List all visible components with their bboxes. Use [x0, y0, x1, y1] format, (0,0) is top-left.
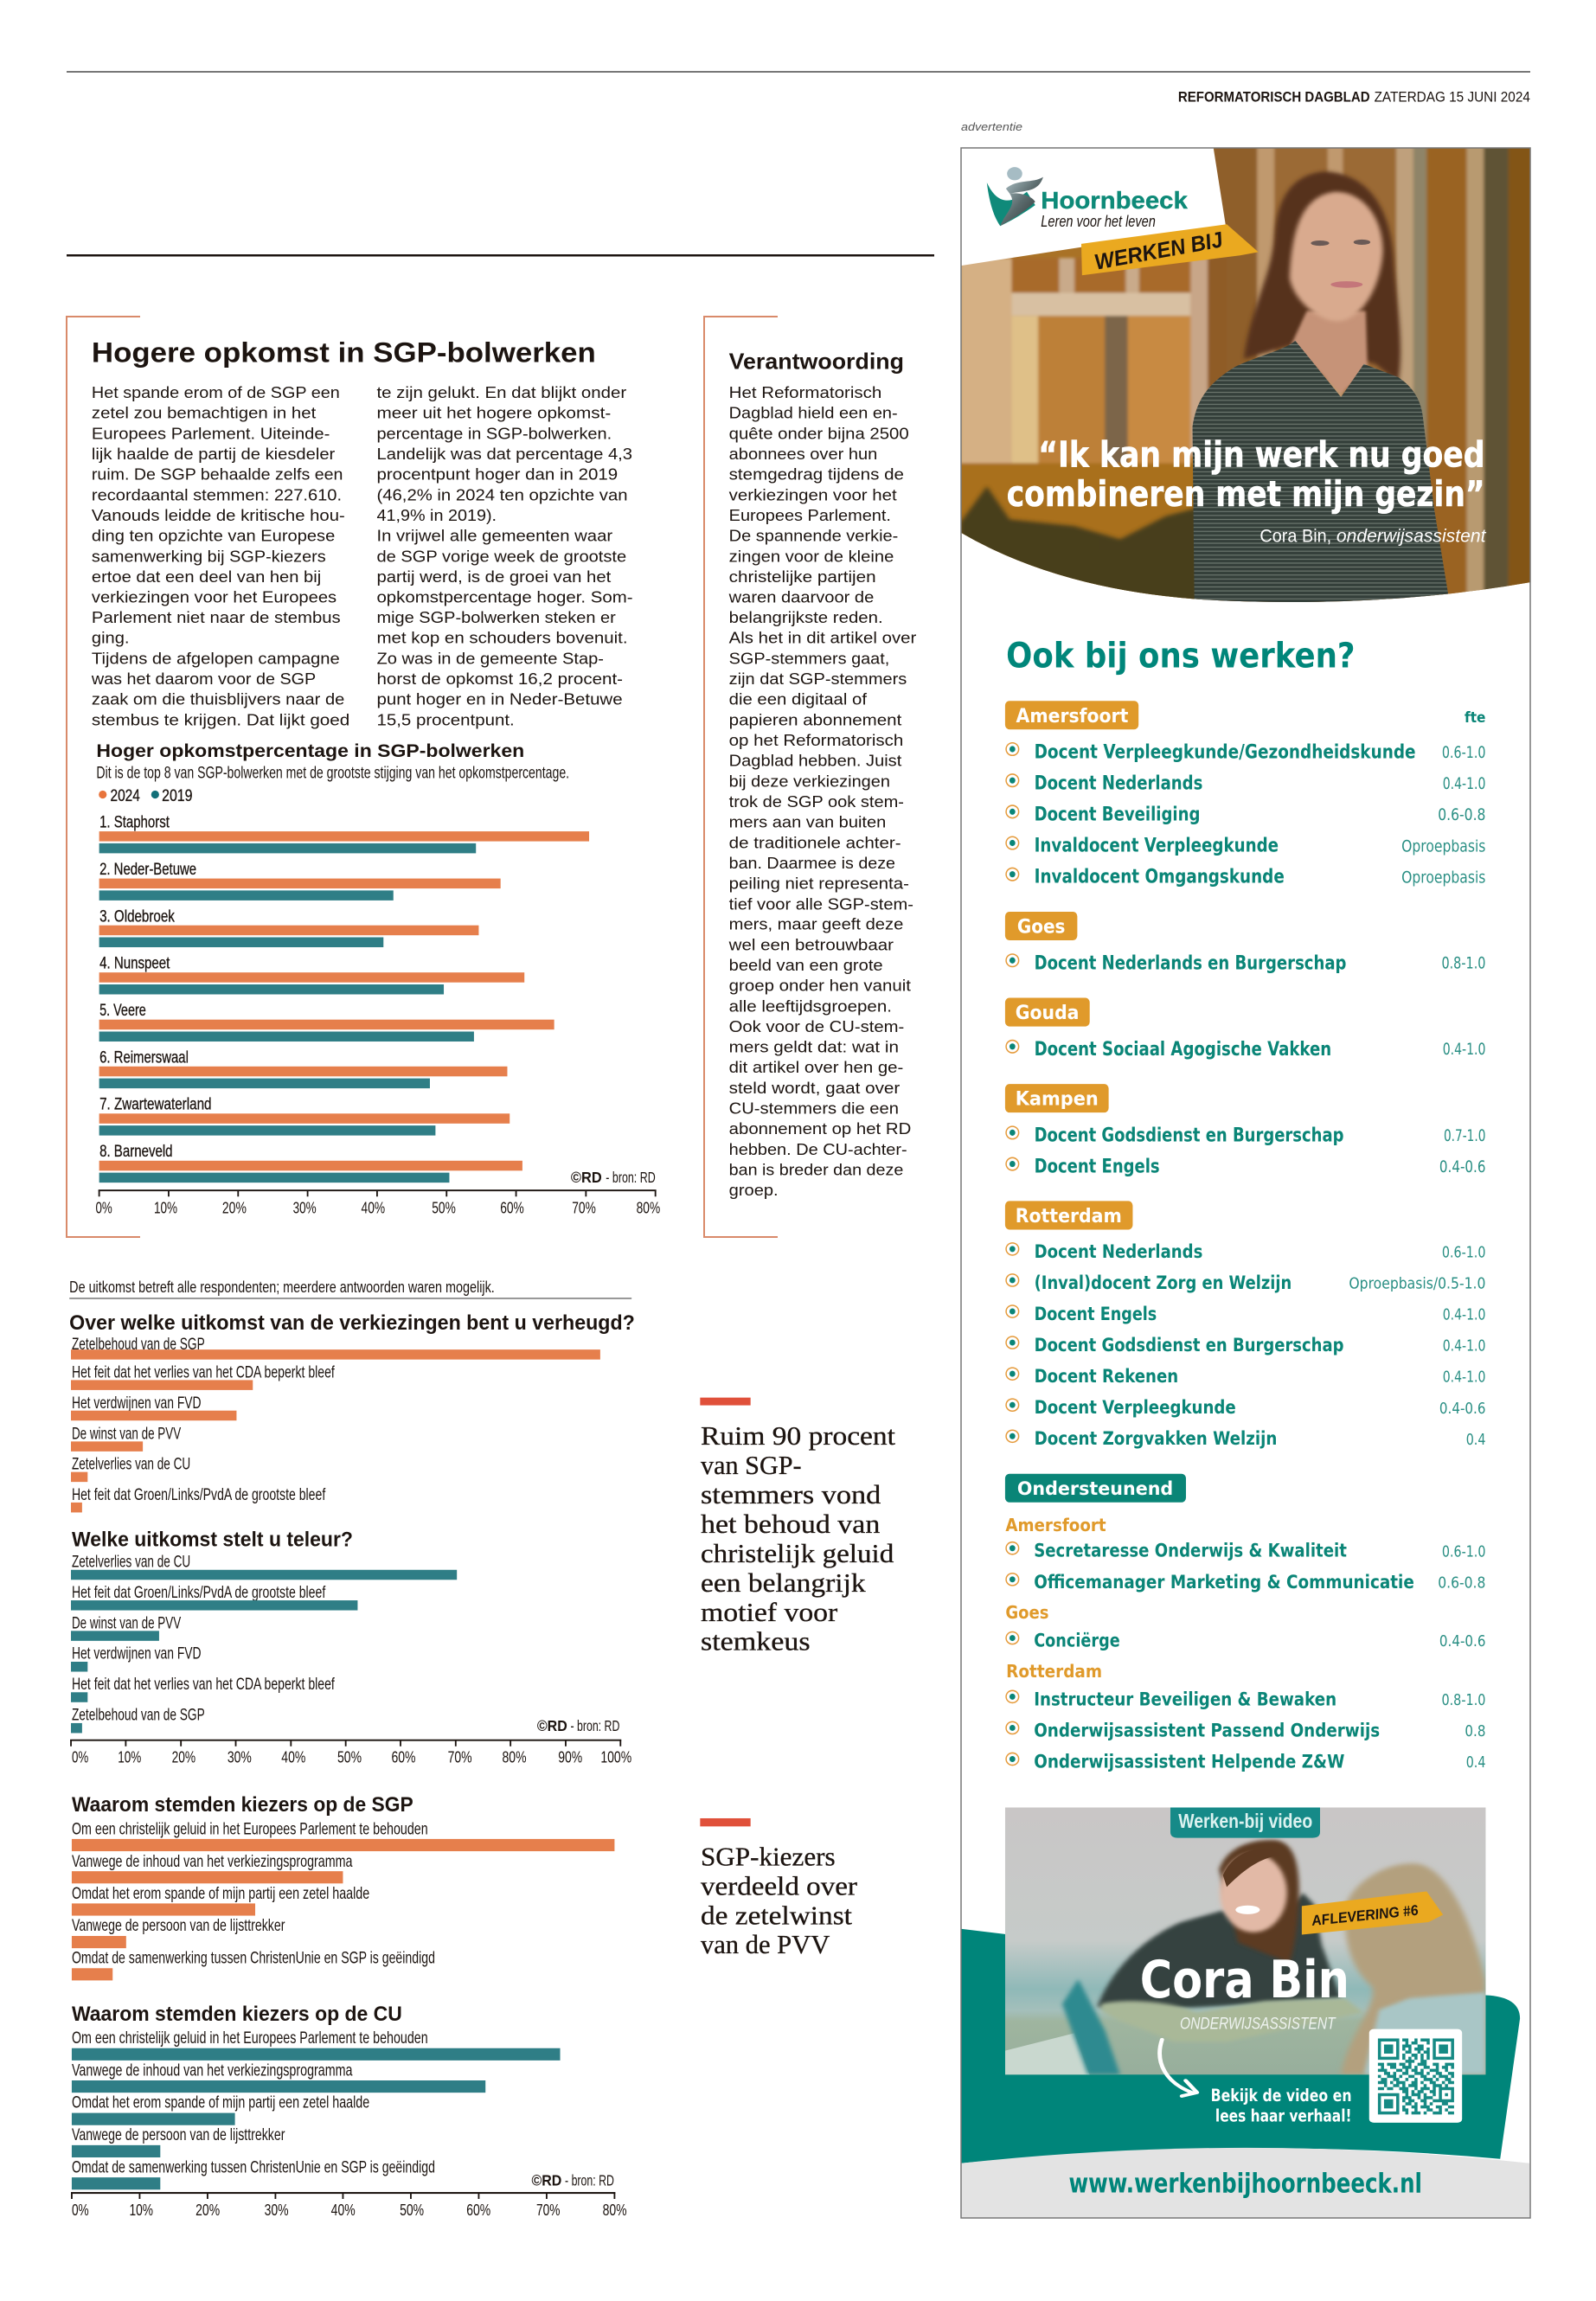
group: ondersteunend Amersfoort: Officemanager Marketing & Communicatie — [1034, 1572, 1414, 1593]
heading: CU: Waarom stemden kiezers op de CU — [72, 2003, 402, 2026]
verantwoording body text: ban is breder dan deze — [729, 1161, 903, 1179]
article text column 1: samenwerking bij SGP-kiezers — [92, 548, 326, 565]
group: Rotterdam vacancies: Docent Zorgvakken Welzijn — [1035, 1428, 1277, 1450]
article text column 2: horst de opkomst 16,2 procent- — [376, 670, 623, 688]
source credit — [531, 2172, 614, 2189]
photo: woman in wooden interior — [960, 145, 1531, 609]
verantwoording body text: quête onder bijna 2500 — [729, 424, 909, 442]
row: Oldebroek: 3. Oldebroek — [99, 907, 175, 926]
call to action text: Bekijk de video en — [1211, 2086, 1352, 2106]
verantwoording body text — [728, 383, 916, 1199]
x axis: 40% — [331, 2201, 356, 2219]
group: Amersfoort: Docent Nederlands — [1035, 772, 1202, 795]
bar chart: teleur: Het feit dat Groen/Links/PvdA de grootste bleef — [72, 1584, 325, 1602]
source credit: ©RD — [571, 1170, 602, 1187]
callout: verdeeld over PVV: SGP-kiezers — [701, 1842, 836, 1871]
note rule — [69, 1298, 631, 1299]
logo: Hoornbeeck: Hoornbeeck — [1041, 188, 1188, 214]
row: Veere — [99, 1002, 554, 1042]
verantwoording body text: abonnement op het RD — [729, 1119, 911, 1138]
callout: ruim 90 procent: stemkeus — [701, 1626, 811, 1656]
row: Zwartewaterland: 7. Zwartewaterland — [99, 1095, 212, 1113]
group: ondersteunend Rotterdam: Onderwijsassistent Helpende Z&W — [1034, 1751, 1344, 1773]
group: Amersfoort: Invaldocent Verpleegkunde — [1035, 835, 1279, 856]
callout: ruim 90 procent: van SGP- — [701, 1451, 802, 1480]
verantwoording body text: Het Reformatorisch — [729, 383, 881, 401]
verantwoording body text: Dagblad hebben. Juist — [729, 752, 902, 770]
ad: vacancies list part 1 — [1005, 636, 1485, 1229]
x axis: 0% — [72, 2201, 89, 2219]
bar chart: verheugd: Het feit dat het verlies van het CDA beperkt bleef — [72, 1363, 335, 1381]
x axis: 90% — [558, 1749, 582, 1766]
article text column 2: punt hoger en in Neder-Betuwe — [376, 690, 623, 708]
x axis: 30% — [293, 1200, 317, 1217]
tape: aflevering #6 — [1302, 1891, 1443, 1934]
group: Amersfoort: fte — [1465, 709, 1485, 726]
article text column 2: percentage in SGP-bolwerken. — [376, 425, 612, 442]
x axis: 40% — [362, 1200, 385, 1217]
article text column 2 — [376, 383, 633, 728]
bar chart: CU: Omdat het erom spande of mijn partij een zetel haalde — [72, 2093, 369, 2112]
top rule and date line — [67, 71, 1530, 106]
name: Cora Bin: Cora Bin — [1140, 1951, 1349, 2010]
bar chart: teleur — [71, 1553, 457, 1733]
group: Amersfoort: 0.6-0.8 — [1438, 806, 1485, 824]
bar chart: SGP: Vanwege de persoon van de lijsttrekker — [72, 1916, 285, 1934]
group: Amersfoort — [1005, 701, 1485, 888]
group: ondersteunend Rotterdam: 0.8-1.0 — [1441, 1692, 1485, 1709]
article text column 2: 41,9% in 2019). — [376, 506, 497, 524]
x axis: 10% — [154, 1200, 177, 1217]
row: Barneveld — [99, 1143, 522, 1183]
heading: teleur: Welke uitkomst stelt u teleur? — [72, 1528, 353, 1551]
group: Kampen: Kampen — [1016, 1088, 1099, 1111]
group: Amersfoort: Docent Verpleegkunde/Gezondheidskunde — [1035, 741, 1416, 763]
group: Rotterdam vacancies: (Inval)docent Zorg en Welzijn — [1035, 1272, 1292, 1294]
callout: ruim 90 procent: christelijk geluid — [701, 1539, 894, 1568]
group: Rotterdam vacancies: 0.4 — [1466, 1432, 1485, 1449]
group: Kampen: 0.4-0.6 — [1439, 1157, 1485, 1176]
article text column 1: was het daarom voor de SGP — [91, 670, 316, 688]
callout: ruim 90 procent: motief voor — [701, 1598, 837, 1627]
verantwoording body text: trok de SGP ook stem- — [729, 792, 904, 811]
chart subtitle: Dit is de top 8 van SGP-bolwerken met de grootste stijging van het opkomstpercentage. — [96, 764, 569, 782]
quote attribution: onderwijsassistent — [1336, 525, 1487, 546]
label: advertentie: advertentie — [961, 120, 1022, 133]
verantwoording body text: die een digitaal of — [729, 690, 868, 708]
panel frame: verantwoording — [704, 317, 778, 1237]
article text column 1 — [91, 383, 349, 728]
verantwoording body text: groep onder hen vanuit — [729, 977, 912, 995]
article text column 1: verkiezingen voor het Europees — [92, 588, 337, 606]
heading: SGP: Waarom stemden kiezers op de SGP — [72, 1793, 413, 1817]
article text column 1: Vanouds leidde de kritische hou- — [92, 506, 345, 524]
x axis: 10% — [118, 1749, 141, 1766]
article text column 2: partij werd, is de groei van het — [376, 567, 612, 586]
row: Barneveld: 8. Barneveld — [99, 1143, 173, 1161]
verantwoording body text: bij deze verkiezingen — [729, 772, 890, 790]
group: Amersfoort: 0.4-1.0 — [1443, 775, 1485, 793]
panel frame: article — [67, 317, 140, 1237]
callouts column — [700, 1398, 896, 1959]
verantwoording body text: stemgedrag tijdens de — [729, 465, 904, 484]
x axis: 30% — [228, 1749, 252, 1766]
x axis — [71, 2192, 627, 2219]
verantwoording body text: alle leeftijdsgroepen. — [729, 997, 892, 1015]
bar chart: teleur: Zetelverlies van de CU — [72, 1553, 190, 1571]
quote attribution: Cora Bin, — [1259, 525, 1331, 546]
top rule and date line: REFORMATORISCH DAGBLAD — [1178, 89, 1370, 106]
ad: photo header with quote — [960, 145, 1531, 609]
arrow — [1160, 2040, 1197, 2096]
bar chart: teleur: Het verdwijnen van FVD — [72, 1644, 202, 1663]
article: Hogere opkomst in SGP-bolwerken — [91, 337, 633, 728]
group: ondersteunend Goes — [1005, 1602, 1485, 1652]
group: Amersfoort: Amersfoort — [1016, 706, 1128, 727]
bar chart: CU: Om een christelijk geluid in het Europees Parlement te behouden — [72, 2029, 428, 2047]
group: Kampen: Docent Godsdienst en Burgerschap — [1035, 1125, 1343, 1147]
x axis: 70% — [448, 1749, 472, 1766]
callout: ruim 90 procent: Ruim 90 procent — [701, 1421, 896, 1451]
verantwoording body text: abonnees over hun — [729, 445, 877, 463]
x axis: 70% — [572, 1200, 596, 1217]
bar chart: CU — [72, 2029, 561, 2189]
article text column 2: In vrijwel alle gemeenten waar — [376, 527, 613, 545]
callout: verdeeld over PVV — [700, 1818, 857, 1959]
group: ondersteunend Amersfoort — [1005, 1515, 1485, 1593]
group: ondersteunend Rotterdam: 0.8 — [1465, 1723, 1485, 1740]
row: Reimerswaal — [99, 1048, 507, 1088]
verantwoording body text: zijn dat SGP-stemmers — [729, 670, 907, 688]
bar chart: verheugd: Het verdwijnen van FVD — [72, 1394, 202, 1413]
ad frame — [961, 148, 1530, 2218]
source credit: - bron: RD — [570, 1718, 619, 1735]
group: ondersteunend Goes: Conciërge — [1034, 1630, 1120, 1652]
ad heading: Ook bij ons werken? — [1006, 636, 1356, 676]
x axis — [95, 1189, 660, 1217]
group: Amersfoort: 0.6-1.0 — [1442, 743, 1485, 762]
row: Zwartewaterland — [99, 1095, 510, 1136]
group: ondersteunend Rotterdam: Onderwijsassistent Passend Onderwijs — [1034, 1720, 1380, 1742]
verantwoording body text: de traditionele achter- — [729, 833, 901, 851]
group: Rotterdam vacancies: Docent Nederlands — [1035, 1241, 1202, 1263]
row: Reimerswaal: 6. Reimerswaal — [99, 1048, 189, 1067]
legend: 2024 — [110, 786, 140, 804]
group: ondersteunend Amersfoort: Secretaresse Onderwijs & Kwaliteit — [1034, 1540, 1347, 1562]
bar chart: verheugd: Zetelverlies van de CU — [72, 1455, 190, 1473]
verantwoording body text: groep. — [729, 1181, 779, 1199]
source credit — [571, 1170, 656, 1187]
survey charts: verheugd and teleur — [69, 1279, 635, 1766]
article text column 1: zaak om die thuisblijvers naar de — [92, 690, 344, 708]
bar chart: SGP: Om een christelijk geluid in het Europees Parlement te behouden — [72, 1819, 428, 1838]
verantwoording body text: tief voor alle SGP-stem- — [729, 894, 913, 913]
bar chart: CU: Omdat de samenwerking tussen ChristenUnie en SGP is geëindigd — [72, 2157, 435, 2176]
x axis: 80% — [637, 1200, 660, 1217]
bar chart: verheugd — [71, 1336, 600, 1512]
group: Rotterdam vacancies: 0.4-1.0 — [1443, 1306, 1485, 1324]
quote attribution — [1259, 525, 1487, 546]
bar chart: teleur: Zetelbehoud van de SGP — [72, 1706, 205, 1724]
callout: ruim 90 procent: het behoud van — [701, 1509, 880, 1539]
x axis: 60% — [391, 1749, 415, 1766]
article text column 1: recordaantal stemmen: 227.610. — [92, 486, 342, 503]
tag: Werken-bij video: Werken-bij video — [1178, 1810, 1312, 1832]
x axis: 20% — [195, 2201, 220, 2219]
verantwoording body text: ban. Daarmee is deze — [729, 854, 895, 872]
source credit: - bron: RD — [565, 2172, 614, 2189]
x axis: 40% — [281, 1749, 305, 1766]
group: Amersfoort: Docent Beveiliging — [1035, 804, 1200, 826]
x axis: 70% — [536, 2201, 561, 2219]
x axis — [70, 1740, 631, 1766]
article text column 2: Landelijk was dat percentage 4,3 — [376, 445, 632, 463]
group: Gouda: Docent Sociaal Agogische Vakken — [1035, 1039, 1331, 1061]
call to action text — [1211, 2086, 1352, 2126]
footer band — [961, 2148, 1529, 2217]
verantwoording body text: verkiezingen voor het — [729, 485, 898, 503]
verantwoording body text: zingen voor de kleine — [729, 547, 894, 565]
article text column 2: procentpunt hoger dan in 2019 — [376, 465, 618, 484]
tag: Werken-bij video — [1170, 1807, 1320, 1838]
group: Amersfoort: Oproepbasis — [1401, 868, 1485, 888]
group: ondersteunend Rotterdam — [1005, 1661, 1485, 1773]
article text column 2: 15,5 procentpunt. — [376, 711, 515, 728]
legend: 2019 — [162, 786, 192, 804]
verantwoording body text: waren daarvoor de — [728, 587, 874, 606]
group: Amersfoort: Oproepbasis — [1401, 837, 1485, 856]
tape: aflevering #6: AFLEVERING #6 — [1310, 1902, 1420, 1929]
bar chart: CU: Vanwege de persoon van de lijsttrekker — [72, 2125, 285, 2144]
row: Veere: 5. Veere — [99, 1002, 146, 1020]
row: Staphorst: 1. Staphorst — [99, 813, 170, 831]
legend — [99, 786, 192, 804]
tag: Rotterdam: Rotterdam — [1016, 1205, 1122, 1227]
group: Gouda: Gouda — [1016, 1003, 1079, 1024]
group: Rotterdam vacancies: Docent Rekenen — [1035, 1366, 1178, 1388]
x axis: 0% — [72, 1749, 88, 1766]
article text column 2: mige SGP-bolwerken steken er — [376, 608, 616, 626]
group: Rotterdam vacancies: Docent Engels — [1035, 1304, 1157, 1325]
woman figure — [1193, 171, 1450, 602]
article text column 1: lijk haalde de partij de kiesdeler — [92, 445, 336, 463]
callout: verdeeld over PVV: de zetelwinst — [701, 1900, 853, 1930]
verantwoording heading: Verantwoording — [729, 349, 904, 375]
verantwoording body text: Dagblad hield een en- — [729, 404, 898, 422]
callout: verdeeld over PVV: verdeeld over — [701, 1871, 857, 1900]
group: ondersteunend Goes: Goes — [1005, 1602, 1048, 1623]
row: Nunspeet: 4. Nunspeet — [99, 954, 170, 972]
group: Rotterdam vacancies: 0.4-1.0 — [1443, 1337, 1485, 1356]
article text column 1: ruim. De SGP behaalde zelfs een — [92, 465, 343, 484]
x axis: 50% — [432, 1200, 456, 1217]
survey note: De uitkomst betreft alle respondenten; meerdere antwoorden waren mogelijk. — [69, 1279, 495, 1296]
bar chart: SGP — [72, 1819, 614, 1980]
verantwoording body text: Europees Parlement. — [729, 506, 891, 524]
x axis: 50% — [337, 1749, 362, 1766]
row: Nunspeet — [99, 954, 524, 995]
row: Neder-Betuwe: 2. Neder-Betuwe — [99, 861, 196, 878]
article text column 1: Europees Parlement. Uiteinde- — [92, 425, 330, 442]
panel: verantwoording text — [728, 349, 916, 1199]
article text column 2: Zo was in de gemeente Stap- — [376, 650, 604, 667]
verantwoording body text: Ook voor de CU-stem- — [729, 1017, 904, 1035]
verantwoording body text: dit artikel over hen ge- — [729, 1058, 903, 1076]
article text column 1: Tijdens de afgelopen campagne — [92, 650, 340, 667]
verantwoording body text: De spannende verkie- — [729, 527, 898, 545]
bar chart: CU: Vanwege de inhoud van het verkiezingsprogramma — [72, 2061, 353, 2080]
quote — [1007, 433, 1485, 515]
group: Rotterdam vacancies — [1005, 1241, 1485, 1450]
x axis: 20% — [222, 1200, 247, 1217]
verantwoording body text: papieren abonnement — [729, 710, 902, 728]
article heading: Hogere opkomst in SGP-bolwerken — [92, 337, 596, 369]
group: ondersteunend Rotterdam: 0.4 — [1466, 1754, 1485, 1772]
bar chart: verheugd: Zetelbehoud van de SGP — [72, 1336, 205, 1354]
group: ondersteunend Amersfoort: Amersfoort — [1005, 1515, 1106, 1535]
verantwoording body text: op het Reformatorisch — [729, 731, 903, 749]
x axis: 60% — [466, 2201, 490, 2219]
callout: ruim 90 procent — [700, 1398, 896, 1656]
bar chart: verheugd: Het feit dat Groen/Links/PvdA de grootste bleef — [72, 1486, 325, 1503]
verantwoording body text: mers aan van buiten — [729, 813, 886, 831]
black rule above article — [67, 254, 934, 256]
verantwoording body text: mers geldt dat: wat in — [729, 1038, 899, 1056]
group: Rotterdam vacancies: 0.6-1.0 — [1442, 1244, 1485, 1262]
article text column 1: stembus te krijgen. Dat lijkt goed — [92, 711, 349, 728]
group: Rotterdam vacancies: Docent Godsdienst en Burgerschap — [1035, 1335, 1343, 1356]
verantwoording body text: beeld van een grote — [729, 956, 883, 974]
x axis: 100% — [600, 1749, 631, 1766]
tag: Ondersteunend — [1005, 1474, 1186, 1503]
verantwoording body text: wel een betrouwbaar — [728, 935, 894, 953]
group: ondersteunend Rotterdam: Rotterdam — [1006, 1661, 1102, 1682]
source credit: - bron: RD — [606, 1170, 656, 1187]
group: Rotterdam vacancies: Oproepbasis/0.5-1.0 — [1349, 1275, 1485, 1293]
article text column 2: meer uit het hogere opkomst- — [376, 404, 611, 422]
bar chart: SGP: Omdat de samenwerking tussen ChristenUnie en SGP is geëindigd — [72, 1948, 435, 1967]
chart title: Hoger opkomstpercentage in SGP-bolwerken — [96, 740, 524, 761]
group: Goes: Docent Nederlands en Burgerschap — [1035, 952, 1346, 975]
tag: Rotterdam — [1005, 1201, 1132, 1229]
article text column 2: (46,2% in 2024 ten opzichte van — [376, 486, 628, 503]
group: Gouda: 0.4-1.0 — [1443, 1041, 1485, 1059]
group: ondersteunend Goes: 0.4-0.6 — [1439, 1633, 1485, 1650]
verantwoording body text: peiling niet representa- — [729, 875, 909, 893]
group: Kampen: Docent Engels — [1035, 1156, 1160, 1178]
role: onderwijsassistent: ONDERWIJSASSISTENT — [1180, 2013, 1336, 2033]
group: Goes — [1005, 912, 1485, 975]
bar chart: verheugd: De winst van de PVV — [72, 1425, 181, 1443]
tag: Ondersteunend: Ondersteunend — [1017, 1478, 1173, 1500]
x axis: 30% — [265, 2201, 289, 2219]
x axis: 80% — [603, 2201, 627, 2219]
verantwoording body text: christelijke partijen — [729, 567, 876, 586]
group: Gouda — [1005, 998, 1485, 1061]
ad: vacancies list part 2 — [1005, 1241, 1485, 1773]
x axis: 50% — [400, 2201, 424, 2219]
group: Kampen — [1005, 1084, 1485, 1178]
bar chart: Hoger opkomstpercentage in SGP-bolwerken — [95, 740, 660, 1217]
verantwoording body text: SGP-stemmers gaat, — [729, 649, 889, 667]
article text column 2: met kop en schouders bovenuit. — [376, 629, 628, 647]
logo: Hoornbeeck: Leren voor het leven — [1041, 213, 1156, 231]
article text column 1: zetel zou bemachtigen in het — [92, 404, 317, 422]
group: Rotterdam vacancies: Docent Verpleegkunde — [1035, 1397, 1236, 1419]
article text column 1: Het spande erom of de SGP een — [92, 383, 340, 401]
source credit: ©RD — [537, 1718, 567, 1735]
x axis: 80% — [503, 1749, 527, 1766]
x axis: 20% — [172, 1749, 195, 1766]
article text column 1: ertoe dat een deel van hen bij — [92, 567, 321, 586]
callout: verdeeld over PVV: van de PVV — [701, 1930, 830, 1959]
photo: video still — [1005, 1807, 1485, 2074]
heading: verheugd: Over welke uitkomst van de verkiezingen bent u verheugd? — [69, 1311, 635, 1335]
group: ondersteunend Amersfoort: 0.6-1.0 — [1442, 1543, 1485, 1561]
survey charts: motieven SGP and CU — [71, 1793, 627, 2219]
source credit — [537, 1718, 619, 1735]
verantwoording body text: belangrijkste reden. — [729, 608, 883, 626]
white corner behind logo — [961, 148, 1226, 266]
article text column 1: ging. — [92, 629, 130, 647]
group: ondersteunend Rotterdam: Instructeur Beveiligen & Bewaken — [1034, 1689, 1336, 1710]
article text column 1: ding ten opzichte van Europese — [92, 527, 335, 545]
verantwoording body text: hebben. De CU-achter- — [729, 1140, 907, 1158]
group: Rotterdam vacancies: 0.4-0.6 — [1439, 1400, 1485, 1418]
verantwoording body text: mers, maar geeft deze — [729, 915, 903, 933]
article text column 2: te zijn gelukt. En dat blijkt onder — [376, 383, 627, 401]
bar chart: SGP: Vanwege de inhoud van het verkiezingsprogramma — [72, 1852, 353, 1870]
call to action text: lees haar verhaal! — [1215, 2106, 1352, 2126]
plant leaves — [960, 486, 1204, 602]
row: Staphorst — [99, 813, 589, 853]
verantwoording body text: CU-stemmers die een — [729, 1099, 899, 1118]
row: Oldebroek — [99, 907, 478, 947]
source credit: ©RD — [531, 2172, 561, 2189]
article text column 2: de SGP vorige week de grootste — [376, 548, 626, 565]
teal band — [961, 1929, 1520, 2163]
row: Neder-Betuwe — [99, 861, 501, 901]
group: Rotterdam vacancies: 0.4-1.0 — [1443, 1368, 1485, 1387]
callout: ruim 90 procent: een belangrijk — [701, 1568, 866, 1598]
bar chart: teleur: De winst van de PVV — [72, 1614, 181, 1632]
x axis: 0% — [95, 1200, 112, 1217]
x axis: 60% — [500, 1200, 524, 1217]
article text column 1: Parlement niet naar de stembus — [92, 608, 341, 626]
x axis: 10% — [130, 2201, 153, 2219]
article text column 2: opkomstpercentage hoger. Som- — [376, 588, 633, 606]
verantwoording body text: steld wordt, gaat over — [729, 1079, 900, 1097]
tape: werken bij: WERKEN BIJ — [1092, 227, 1226, 274]
group: Kampen: 0.7-1.0 — [1444, 1126, 1485, 1145]
group: Goes: 0.8-1.0 — [1441, 954, 1485, 973]
logo: Hoornbeeck — [987, 167, 1188, 231]
callout: ruim 90 procent: stemmers vond — [701, 1480, 881, 1509]
bar chart: SGP: Omdat het erom spande of mijn partij een zetel haalde — [72, 1884, 369, 1902]
bar chart: teleur: Het feit dat het verlies van het CDA beperkt bleef — [72, 1676, 335, 1694]
QR code — [1369, 2029, 1462, 2123]
group: Amersfoort: Invaldocent Omgangskunde — [1035, 866, 1285, 888]
ad: bottom video block — [961, 1807, 1529, 2217]
top rule and date line: ZATERDAG 15 JUNI 2024 — [1375, 89, 1530, 106]
group: Goes: Goes — [1017, 916, 1065, 939]
group: ondersteunend Amersfoort: 0.6-0.8 — [1438, 1574, 1485, 1592]
verantwoording body text: Als het in dit artikel over — [729, 629, 916, 647]
